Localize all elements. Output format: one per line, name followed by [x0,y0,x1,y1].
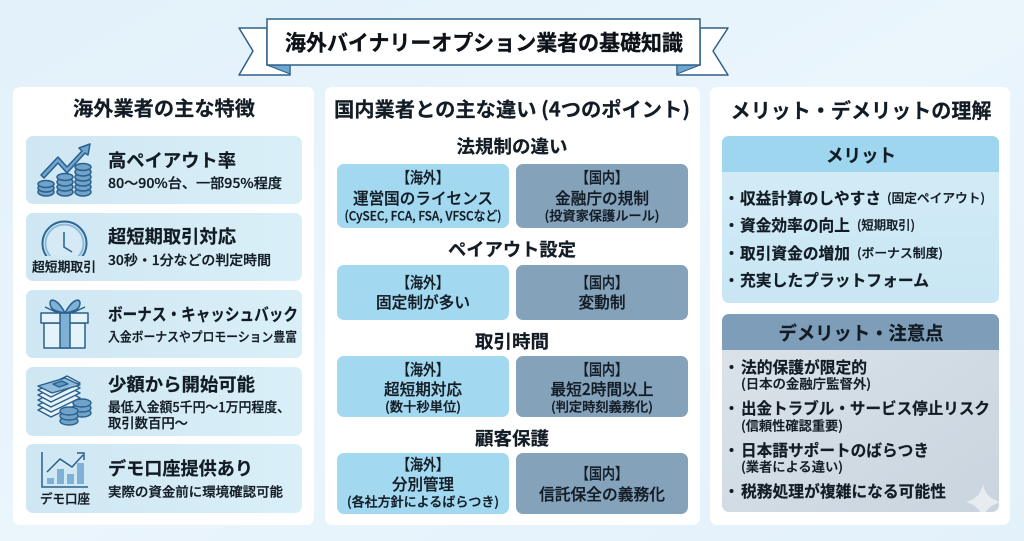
icon: banknotes and coins [38,376,91,425]
domestic box [516,453,688,514]
domestic box [516,265,688,320]
heading: merits and demerits: メリット・デメリットの理解 [730,94,992,124]
card title: 超短期取引対応 [108,223,236,249]
overseas box: 【海外】 [397,358,449,380]
demerit list [730,354,1001,520]
icon: clock [42,220,88,256]
card description: 入金ボーナスやプロモーション豊富 [108,326,297,346]
card title: 少額から開始可能 [108,371,255,397]
merit list [730,185,985,291]
section: trading hours [337,328,688,417]
domestic box: (投資家保護ルール) [544,206,660,224]
overseas box [337,265,509,320]
icon: coins and rising arrow [38,144,91,196]
overseas box: (CySEC, FCA, FSA, VFSCなど) [344,206,502,224]
section heading: 法規制の違い [456,133,568,159]
card title: ボーナス・キャッシュバック [108,300,298,326]
overseas box [337,453,509,514]
section: payout settings [337,236,688,320]
overseas box: (数十秒単位) [385,396,461,416]
heading: features: 海外業者の主な特徴 [73,92,255,122]
overseas box [337,164,509,228]
panel: merits and demerits [710,87,1010,525]
overseas box: 超短期対応 [384,376,462,400]
domestic box: 【国内】 [576,166,628,188]
merit list: (固定ペイアウト) [887,188,985,206]
icon label: デモ口座 [40,488,90,508]
card: bonus and cashback [26,290,302,358]
section: regulation [337,133,688,228]
demerit box [722,314,1001,520]
card description: 最低入金額5千円〜1万円程度、 [108,396,290,416]
overseas box: 【海外】 [397,166,449,188]
card description: 実際の資金前に環境確認可能 [108,482,283,500]
icon: demo chart [42,452,88,487]
demerit list: (信頼性確認重要) [741,416,843,434]
overseas box: 運営国のライセンス [353,185,493,209]
merit header: メリット [826,142,896,168]
card description [108,396,290,432]
overseas box: 分別管理 [392,471,454,495]
card title: 高ペイアウト率 [108,147,236,173]
domestic box [516,356,688,417]
demerit list: 法的保護が限定的 [741,354,867,378]
decorative sparkle [966,484,999,512]
merit list: 収益計算のしやすさ [740,185,881,209]
heading: differences: 国内業者との主な違い (4つのポイント) [334,94,690,122]
card: high payout [26,136,302,204]
demerit list: 出金トラブル・サービス停止リスク [741,395,990,419]
demerit list: (日本の金融庁監督外) [741,374,871,392]
card: start with small amount [26,367,302,436]
overseas box: 【海外】 [397,271,449,293]
merit list: (ボーナス制度) [857,242,943,262]
domestic box: 【国内】 [576,462,628,484]
demerit list: 税務処理が複雑になる可能性 [741,478,946,502]
card: demo account [26,444,302,513]
domestic box: 最短2時間以上 [550,376,654,400]
domestic box: 変動制 [578,289,626,313]
overseas box [337,356,509,417]
section heading: 顧客保護 [475,425,549,451]
domestic box: 信託保全の義務化 [539,481,665,505]
merit list: 資金効率の向上 [740,212,850,236]
section heading: ペイアウト設定 [448,236,576,262]
demerit header: デメリット・注意点 [778,320,944,346]
card description: 80〜90%台、一部95%程度 [108,172,283,192]
panel: differences from domestic brokers [325,87,700,525]
overseas box: (各社方針によるばらつき) [347,492,499,510]
overseas box: 【海外】 [397,453,449,475]
merit list: 充実したプラットフォーム [740,267,929,291]
domestic box: 【国内】 [576,358,628,380]
card description: 30秒・1分などの判定時間 [108,249,271,269]
merit list: 取引資金の増加 [740,240,850,264]
icon label: 超短期取引 [32,256,96,276]
section heading: 取引時間 [475,328,549,354]
card description: 取引数百円〜 [108,412,188,432]
overseas box: 固定制が多い [376,289,470,313]
domestic box: 金融庁の規制 [555,185,649,209]
merit box [722,136,999,303]
domestic box: 【国内】 [576,271,628,293]
section: customer protection [337,425,688,514]
title ribbon: 海外バイナリーオプション業者の基礎知識 [285,26,683,58]
demerit list: 日本語サポートのばらつき [741,437,929,461]
icon: gift box [41,300,88,348]
card: ultra short-term trades [26,213,302,281]
domestic box: (判定時刻義務化) [551,396,653,416]
domestic box [516,164,688,228]
merit list: (短期取引) [857,214,915,234]
card title: デモ口座提供あり [108,455,253,481]
panel: overseas broker features [13,87,314,525]
demerit list: (業者による違い) [741,456,843,476]
title ribbon [239,19,728,75]
